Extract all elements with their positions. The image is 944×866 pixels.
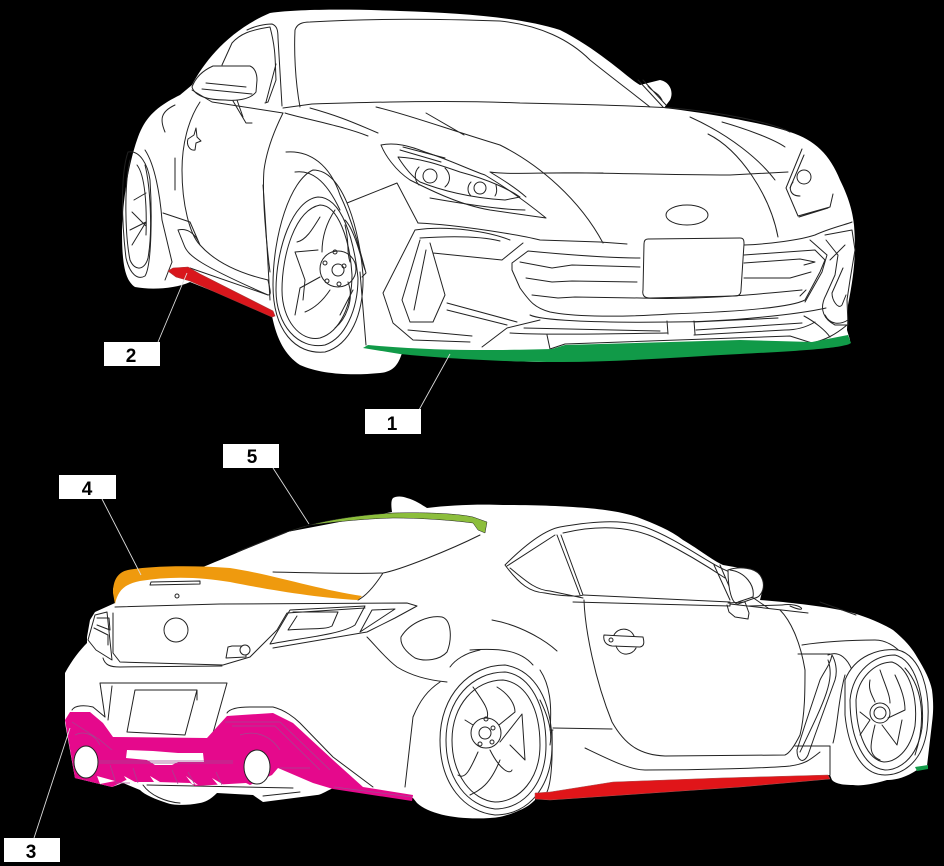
side sill lines [553,654,852,775]
right taillight [270,606,395,644]
rear wheel near [440,665,552,815]
leader line 4 [102,499,141,575]
right exhaust [244,750,270,784]
part 2: side skirt rear view (red) [535,775,830,800]
part 5: roof spoiler (olive) [287,513,487,533]
sill details [163,213,270,295]
rear quarter line [492,620,557,651]
left exhaust [74,746,98,778]
front grille [510,222,852,349]
door handle [187,128,201,150]
front car illustration [122,10,855,374]
headlight left [381,144,603,218]
wheel arch near [470,649,553,792]
trunk lid [113,581,417,665]
right mirror lines [638,80,666,107]
part 1: front lip tip (green) [915,765,928,771]
label 1 [365,409,421,435]
leader line 5 [273,468,309,524]
part 4: trunk spoiler (orange) [113,566,362,604]
license plate [100,683,227,733]
label 3: 3 [26,842,36,863]
windshield [295,19,650,107]
part 2: side skirt (red) [168,267,275,317]
rear car illustration [65,496,933,818]
side mirror [727,568,782,619]
label 2 [104,342,160,367]
label 1: 1 [387,414,398,435]
right bumper vent [804,230,855,337]
right headlight [786,149,833,217]
emblem [666,205,708,225]
rear glass [237,532,480,600]
rear car silhouette [65,496,933,818]
front wheel [273,170,363,352]
label 2: 2 [126,346,136,367]
rear side window [505,522,735,600]
trunk emblem [164,618,188,642]
leader line 1 [419,354,450,410]
hood lines [376,107,627,244]
beltline [573,595,856,615]
trunk badge [226,646,246,658]
label 4 [59,475,116,500]
bottom lines [72,706,373,803]
rear fender line [103,637,480,787]
part 3: rear diffuser (magenta) [65,712,413,801]
left taillight [88,612,112,660]
left bumper vent [383,228,540,347]
fuel door [401,617,450,660]
leader line 3 [34,728,70,838]
license plate [643,238,744,298]
label 3 [4,838,60,863]
label 5 [223,444,279,468]
leader line 2 [158,273,187,342]
side window [247,24,282,106]
front car silhouette [122,10,855,374]
door and A-pillar lines [192,90,378,136]
front wheel arch [263,152,418,345]
door handle [604,629,644,654]
cowl line [283,101,790,132]
side mirror [192,66,257,100]
rear wheel [122,150,172,277]
label 5: 5 [247,447,258,468]
door outline [584,600,805,756]
front wheel far [845,650,928,775]
part 1: front lip spoiler (green) [363,335,851,362]
label 4: 4 [82,479,93,500]
